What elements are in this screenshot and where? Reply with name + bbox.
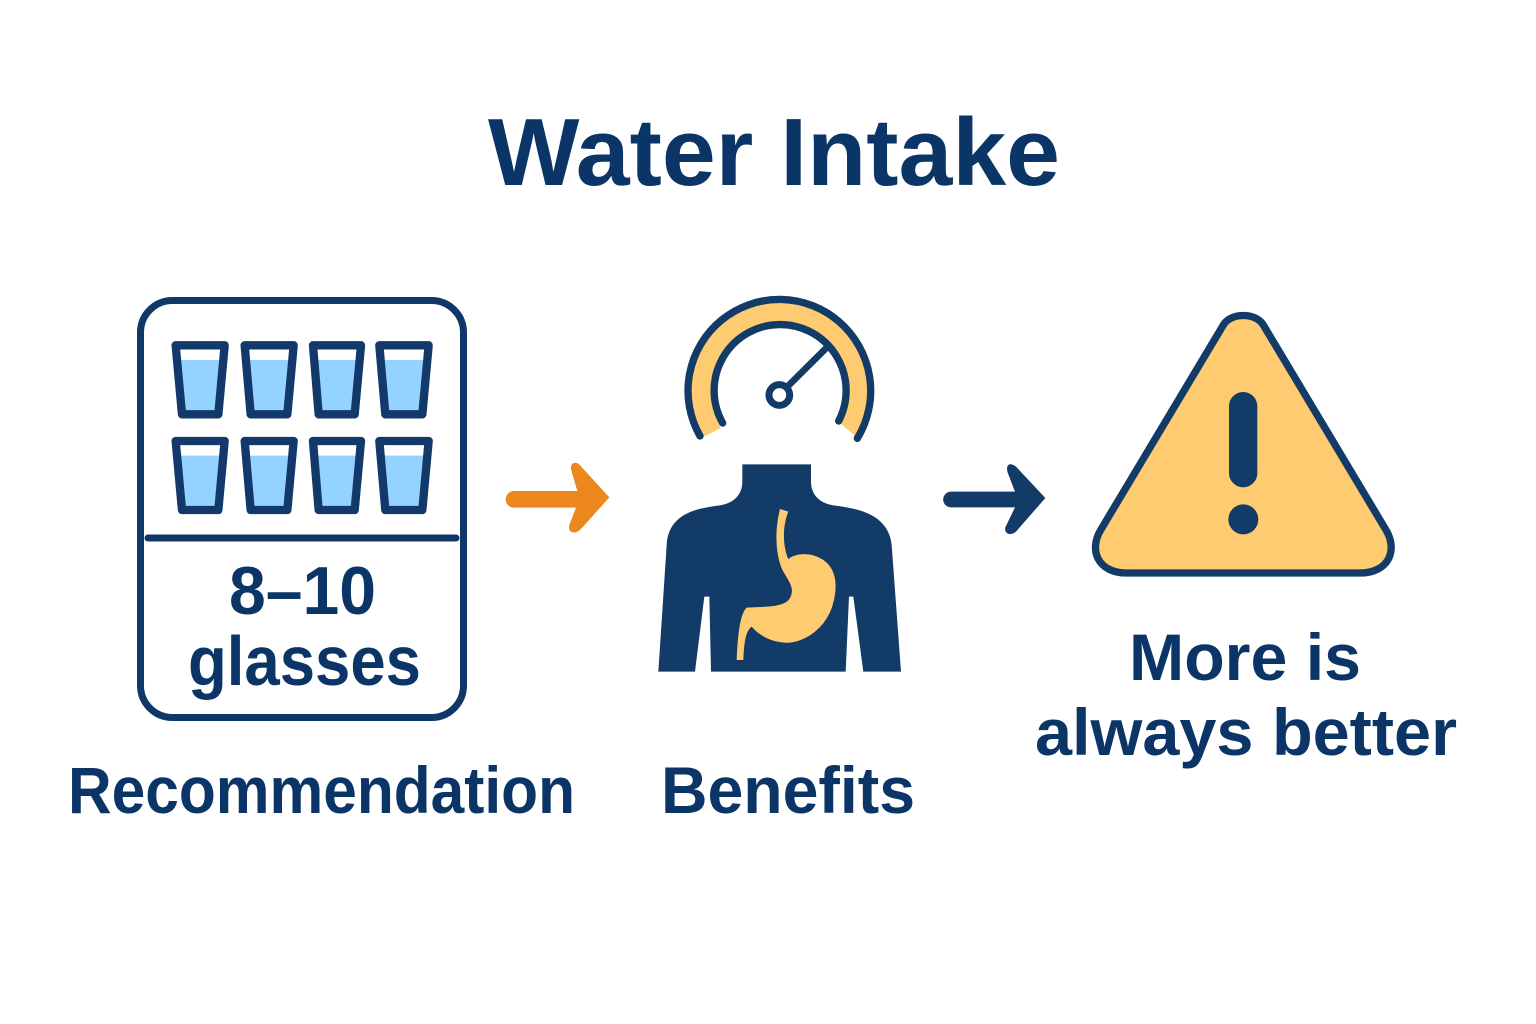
stomach — [737, 509, 836, 660]
icon: gauge — [688, 299, 871, 438]
icon: torso with stomach — [658, 464, 901, 672]
icon: eight water glasses — [176, 345, 429, 510]
warning text: always better — [1035, 695, 1457, 769]
label: recommendation: Recommendation — [68, 753, 575, 827]
label: benefits: Benefits — [661, 753, 915, 827]
panel: recommendation — [140, 300, 464, 718]
card frame — [140, 300, 464, 718]
amount: 8–10: 8–10 — [229, 553, 376, 629]
icon: warning triangle — [1095, 315, 1391, 573]
arrow: navy — [943, 464, 1045, 534]
warning text: More is — [1129, 620, 1361, 694]
arrow: orange — [506, 463, 609, 532]
unit: glasses: glasses — [188, 622, 421, 700]
torso silhouette — [658, 464, 901, 672]
warning text — [1035, 620, 1457, 769]
title: Water Intake — [488, 99, 1060, 206]
